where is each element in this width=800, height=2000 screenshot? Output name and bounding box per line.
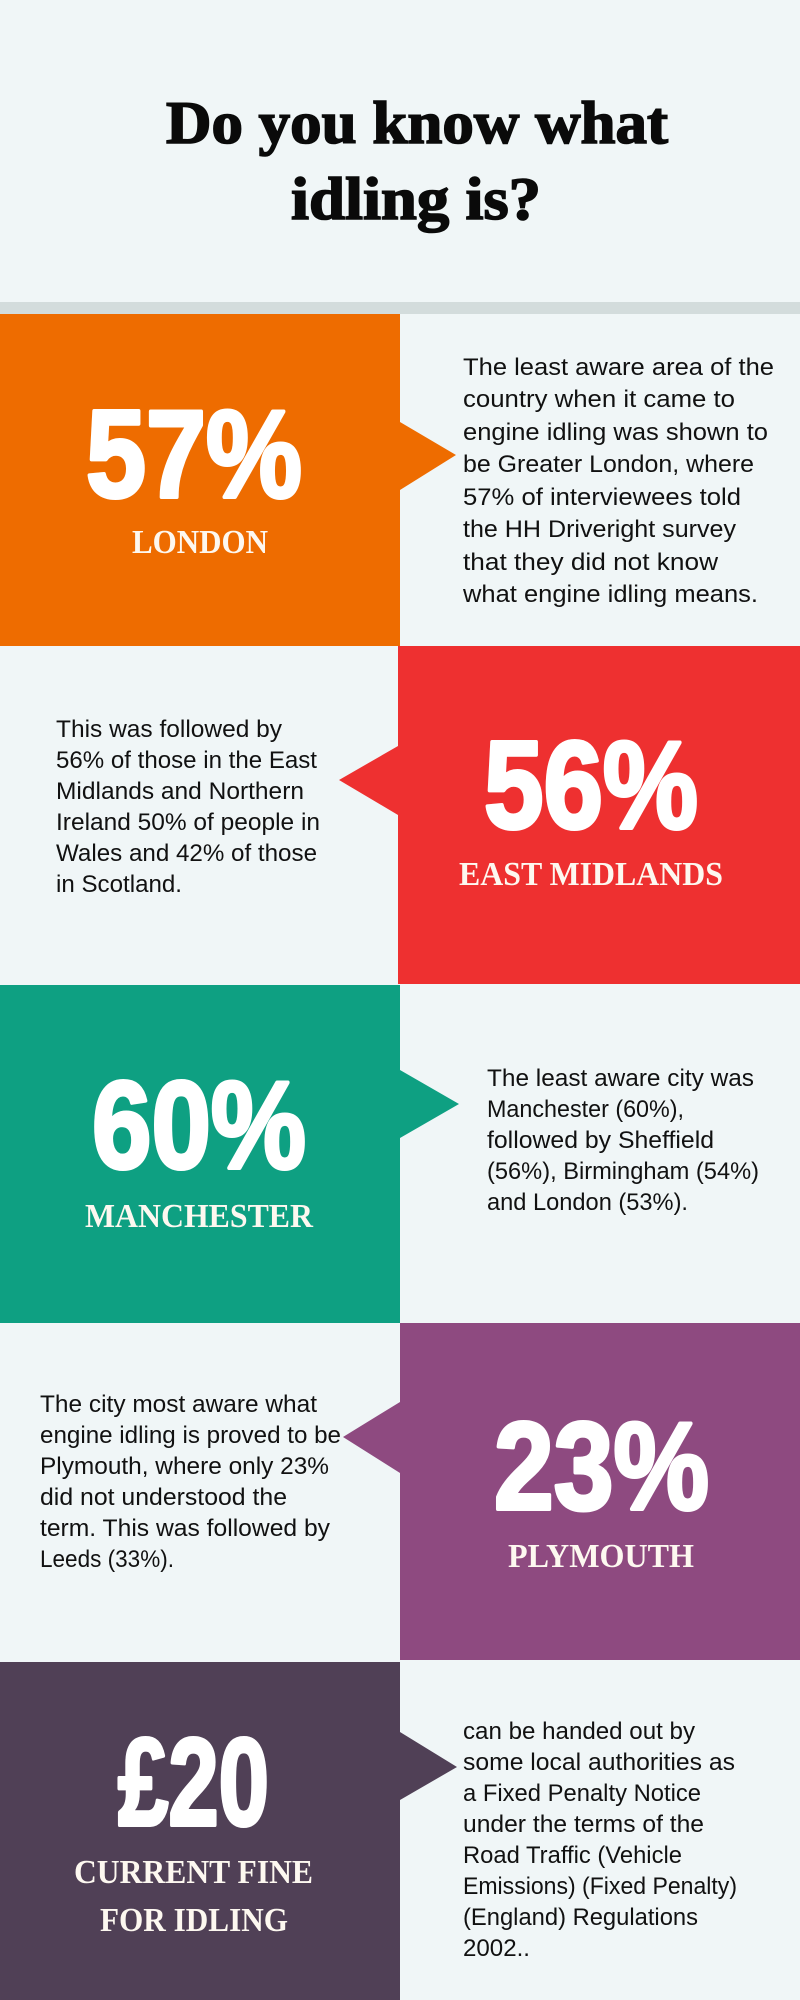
label: East Midlands: EAST MIDLANDS: [459, 856, 723, 893]
text block: East Midlands: Ireland 50% of people in: [56, 809, 320, 836]
text block: East Midlands: in Scotland.: [56, 871, 182, 898]
text block: Manchester: (56%), Birmingham (54%): [487, 1158, 759, 1185]
panel: East Midlands: [339, 646, 800, 984]
text block: East Midlands: Midlands and Northern: [56, 778, 304, 805]
text block: East Midlands: Wales and 42% of those: [56, 840, 317, 867]
text block: London: 57% of interviewees told: [463, 484, 741, 511]
panel: current fine: [0, 1662, 457, 2000]
text block: Plymouth: Plymouth, where only 23%: [40, 1453, 329, 1480]
text block: Manchester: and London (53%).: [487, 1189, 688, 1216]
label: London: LONDON: [132, 524, 268, 561]
statistic: 56%: 56%: [484, 717, 698, 855]
label: Manchester: MANCHESTER: [85, 1198, 313, 1235]
title: idling is?: [291, 166, 541, 232]
orange panel with arrow: [0, 314, 456, 646]
text block: Plymouth: The city most aware what: [40, 1391, 317, 1418]
text block: London: the HH Driveright survey: [463, 516, 736, 543]
text block: East Midlands: 56% of those in the East: [56, 747, 317, 774]
text block: current fine: can be handed out by: [463, 1718, 695, 1745]
green panel with arrow: [0, 985, 459, 1323]
text block: Plymouth: engine idling is proved to be: [40, 1422, 341, 1449]
red panel with arrow: [339, 646, 800, 984]
text block: London: [462, 354, 774, 608]
label: current fine for idling: FOR IDLING: [100, 1902, 288, 1939]
text block: East Midlands: [56, 716, 320, 898]
statistic: 57%: 57%: [86, 386, 302, 524]
text block: current fine: (England) Regulations: [463, 1904, 698, 1931]
text block: Manchester: The least aware city was: [487, 1065, 754, 1092]
text block: London: The least aware area of the: [463, 354, 774, 381]
statistic: £20: £20: [118, 1714, 269, 1852]
title: Do you know what: [166, 90, 668, 156]
panel: Manchester: [0, 985, 459, 1323]
purple panel with arrow: [343, 1323, 800, 1660]
label: current fine for idling: [74, 1854, 313, 1939]
text block: Manchester: followed by Sheffield: [487, 1127, 714, 1154]
text block: London: country when it came to: [463, 386, 735, 413]
text block: Plymouth: [40, 1391, 341, 1573]
statistic: 60%: 60%: [92, 1057, 306, 1195]
text block: Manchester: [487, 1065, 759, 1216]
panel: Plymouth: [343, 1323, 800, 1660]
text block: current fine: under the terms of the: [463, 1811, 704, 1838]
text block: current fine: some local authorities as: [463, 1749, 735, 1776]
panel: London: [0, 314, 456, 646]
text block: London: be Greater London, where: [463, 451, 754, 478]
text block: current fine: [463, 1718, 737, 1962]
text block: London: what engine idling means.: [462, 581, 758, 608]
text block: current fine: 2002..: [463, 1935, 530, 1962]
text block: current fine: a Fixed Penalty Notice: [463, 1780, 701, 1807]
text block: current fine: Road Traffic (Vehicle: [463, 1842, 682, 1869]
text block: London: engine idling was shown to: [463, 419, 768, 446]
dark panel with arrow: [0, 1662, 457, 2000]
title: [166, 90, 668, 232]
label: Plymouth: PLYMOUTH: [508, 1538, 694, 1575]
text block: Plymouth: did not understood the: [40, 1484, 287, 1511]
text block: Plymouth: term. This was followed by: [40, 1515, 330, 1542]
text block: current fine: Emissions) (Fixed Penalty): [463, 1873, 737, 1900]
text block: Plymouth: Leeds (33%).: [40, 1546, 174, 1573]
label: current fine for idling: CURRENT FINE: [74, 1854, 313, 1891]
text block: London: that they did not know: [463, 549, 719, 576]
statistic: 23%: 23%: [494, 1398, 709, 1536]
text block: Manchester: Manchester (60%),: [487, 1096, 684, 1123]
text block: East Midlands: This was followed by: [56, 716, 282, 743]
